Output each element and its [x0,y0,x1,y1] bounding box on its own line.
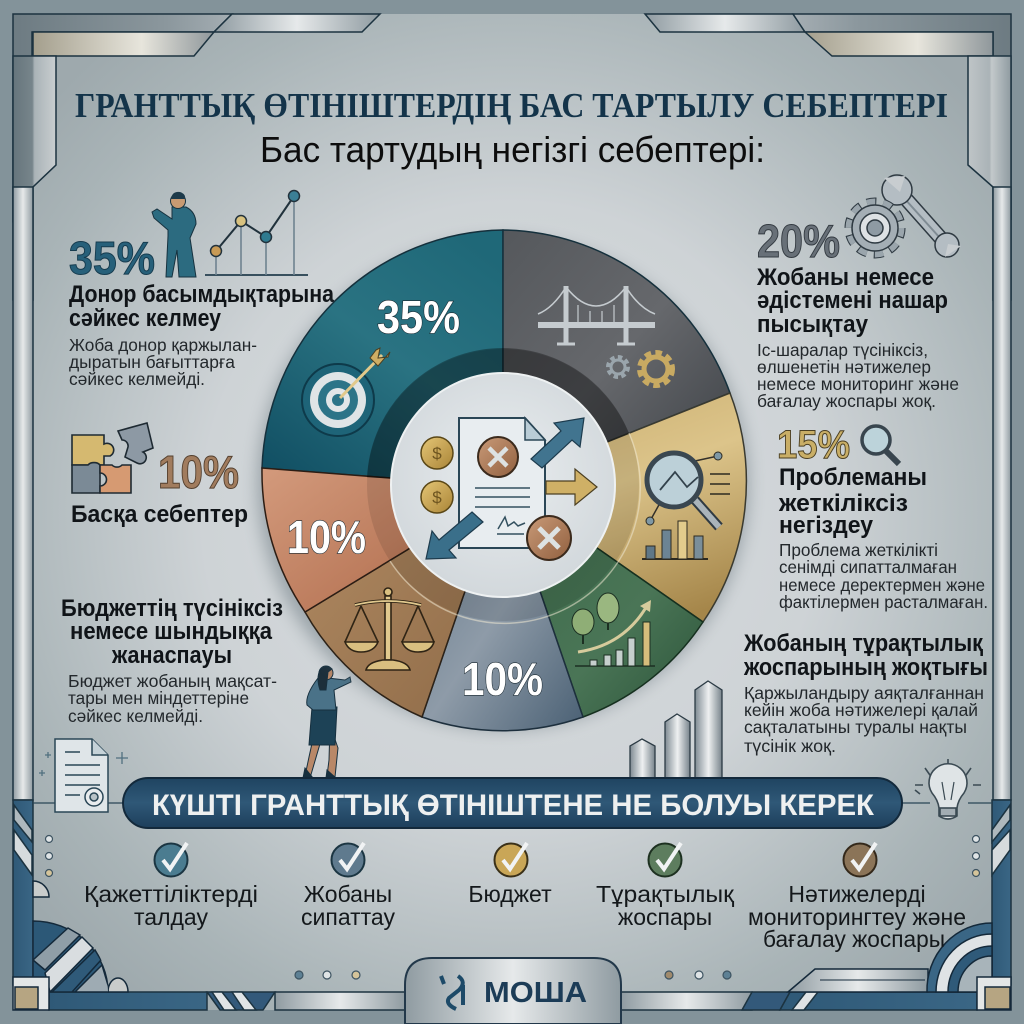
checklist item: monitoring plan: Нәтижелерді [788,881,926,907]
icon: small magnifier [862,426,899,464]
text block: budget: немесе шындыққа [70,618,273,645]
text block: sustainability: түсінік жоқ. [744,736,836,756]
segment: copper 10% [262,468,503,612]
text block: donor priorities: Донор басымдықтарына [69,281,335,308]
text block: methodology: Жобаны немесе [756,264,934,291]
checklist item: monitoring plan: бағалау жоспары [763,926,945,952]
checklist item: sustainability plan [596,843,735,930]
frame: side stripes and bottom bars [13,800,1011,1010]
icon: scales [345,588,434,670]
checklist item: sustainability plan: Тұрақтылық [596,881,735,907]
segment: green [503,485,703,717]
banner: КҮШТІ ГРАНТТЫҚ ӨТІНІШТЕНЕ НЕ БОЛУЫ КЕРЕК [152,789,875,822]
stat: 20%: 20% [757,215,840,267]
icon: coin top: $ [432,444,442,463]
checklist item: budget: Бюджет [468,881,552,907]
checklist item: needs analysis [84,843,258,930]
checklist item: monitoring plan: мониторингтеу және [748,904,966,930]
text block: problem justification: негіздеу [779,512,874,539]
logo plate [405,958,621,1024]
segment: bronze [305,485,503,717]
icon: document fold [525,418,545,440]
segment: gold [503,393,746,622]
text block: donor priorities: Жоба донор қаржылан- [69,335,257,355]
heading: other reasons: Басқа себептер [71,501,248,528]
title: ГРАНТТЫҚ ӨТІНІШТЕРДІҢ БАС ТАРТЫЛУ СЕБЕПТЕРІ [75,86,948,125]
icon: reject mark top [478,437,518,477]
icon: metallic bars [630,681,722,780]
arrow: teal up right [531,418,584,468]
checklist item: project description: Жобаны [304,881,392,907]
text block: budget [61,595,283,726]
icon: lightbulb [915,759,981,819]
frame: top right corner [645,14,1011,800]
text block: methodology: Іс-шаралар түсініксіз, [757,340,928,360]
document signature [498,517,525,529]
text block: sustainability: сақталатыны туралы нақты [744,717,967,737]
text block: problem justification: Проблеманы [779,464,927,491]
frame: bottom left quarter gear [33,881,128,992]
stat: 35%: 35% [69,232,155,284]
segment: steel 10% [422,485,583,731]
ring label: 10% copper: 10% [287,511,366,563]
icon: coin bottom: $ [432,488,442,507]
text block: problem justification: Проблема жеткілікті [779,540,938,560]
text block: methodology: бағалау жоспары жоқ. [757,391,936,411]
checklist item: needs analysis: талдау [134,904,208,930]
checklist item: project description [301,843,395,930]
checklist item: monitoring plan [748,843,966,952]
banner connectors [33,802,992,804]
icon: magnifier with bar chart [642,452,730,559]
text block: budget: сәйкес келмейді. [68,706,203,726]
icon: bridge [538,286,655,344]
text block: budget: жанаспауы [111,642,232,669]
frame: top left corner [13,14,380,800]
icon: trees and growth chart [572,593,655,666]
text block: donor priorities: сәйкес келмеу [69,305,222,332]
centre hub [391,373,615,597]
checklist item: needs analysis: Қажеттіліктерді [84,881,258,907]
banner [123,778,902,828]
checklist item: budget [468,843,552,907]
icon: woman pointing [303,666,351,778]
text block: sustainability [743,630,988,756]
text block: methodology [756,264,959,411]
inner highlight line [390,433,640,623]
arrow: teal down left [426,512,483,559]
logo icon [441,976,463,1009]
text block: donor priorities [69,281,335,389]
icon: certificate document [39,739,128,812]
checklist item: project description: сипаттау [301,904,395,930]
icon: gears on grey segment [609,354,671,384]
text block: problem justification [778,464,988,612]
icon: man presenting with line chart [152,190,308,277]
inner soft band [379,361,627,609]
text block: problem justification: сенімді сипатталмаған [779,557,957,577]
text block: problem justification: жеткіліксіз [778,490,908,517]
frame: corner squares [13,977,1011,1010]
text block: donor priorities: дыратын бағыттарға [69,352,235,372]
icon: target with arrow [302,348,390,436]
icon: coin top [421,437,453,469]
segment: teal 35% [262,230,503,485]
centre illustration [421,418,597,560]
text block: sustainability: жоспарының жоқтығы [743,654,988,681]
icon: gear and wrench [850,175,961,257]
text block: problem justification: немесе деректермен және [779,575,985,595]
segment: dark grey [503,230,730,485]
document text lines [475,488,530,534]
text block: budget: Бюджет жобаның мақсат- [68,671,277,691]
checklist item: sustainability plan: жоспары [618,904,712,930]
frame: bottom right arcs [788,923,992,992]
text block: sustainability: кейін жоба нәтижелері қалай [744,700,978,720]
text block: budget: Бюджеттің түсініксіз [61,595,283,622]
text block: methodology: немесе мониторинг және [757,374,959,394]
ring label: 10% steel: 10% [462,653,543,705]
text block: budget: тары мен міндеттеріне [68,688,249,708]
arrow: gold right [546,469,597,505]
text block: methodology: өлшенетін нәтижелер [757,357,931,377]
text block: donor priorities: сәйкес келмейді. [69,369,205,389]
ring label: 35%: 35% [377,291,460,343]
donut chart [257,230,749,731]
text block: methodology: әдістемені нашар [757,287,948,314]
stat: 10% other: 10% [158,446,239,498]
subtitle: Бас тартудың негізгі себептері: [260,129,765,170]
side dots [46,836,980,979]
icon: coin bottom [421,481,453,513]
logo text: МОША [484,977,587,1009]
icon: reject mark bottom [527,516,571,560]
stat: 15%: 15% [777,423,850,467]
inner dark band: teal and grey [379,360,618,478]
icon: document [459,418,545,548]
text block: sustainability: Қаржыландыру аяқталғаннан [744,683,984,703]
text block: sustainability: Жобаның тұрақтылық [743,630,984,657]
icon: puzzle pieces [72,423,153,493]
text block: problem justification: фактілермен расталмаған. [779,592,988,612]
text block: methodology: пысықтау [757,311,869,338]
